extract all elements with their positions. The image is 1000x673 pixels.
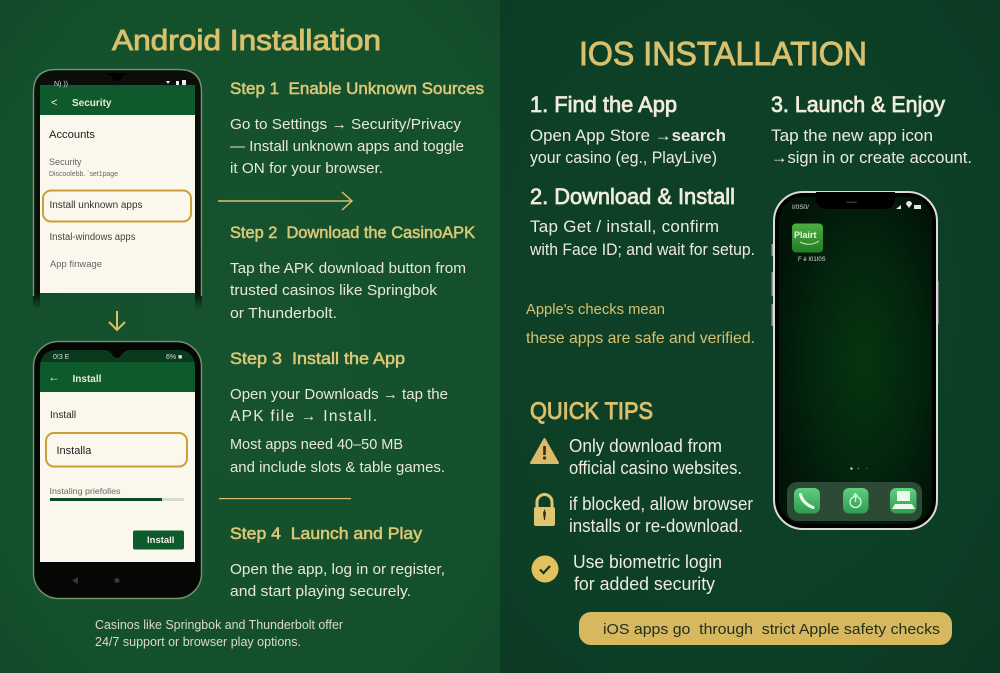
- phone: Android security settings: Security: [72, 98, 112, 109]
- phone: Android security settings: [33, 70, 202, 309]
- step 2: trusted casinos like Springbok: [230, 282, 438, 299]
- background: iOS panel: [500, 0, 1000, 673]
- phone: Android install screen: 6% ■: [166, 354, 182, 361]
- app icon: Plairt: [792, 224, 826, 263]
- iOS step 1: Open App Store →search: [530, 126, 726, 145]
- arrow: down between phones: [109, 311, 125, 330]
- iPhone mockup: I/0S0/: [792, 204, 809, 211]
- step 4: [230, 524, 445, 600]
- phone: Android security settings: Accounts: [49, 129, 96, 141]
- button: Install: Install: [147, 535, 174, 546]
- iOS step 3: 3. Launch & Enjoy: [771, 92, 945, 117]
- step 3: APK file → Install.: [230, 408, 377, 425]
- highlight: Install unknown apps: Install unknown apps: [50, 200, 142, 211]
- highlight: Installa: [46, 433, 187, 466]
- iOS step 2: [529, 184, 755, 259]
- phone: Android install screen: ←: [48, 370, 60, 384]
- step 3: and include slots & table games.: [230, 459, 445, 476]
- step 4: and start playing securely.: [230, 583, 411, 600]
- tip: official websites: official casino websites.: [569, 458, 742, 478]
- arrow: right from step 1: [218, 192, 352, 210]
- step 3: Step 3 Install the App: [230, 349, 405, 368]
- background: Android panel: [0, 0, 500, 673]
- phone: Android security settings: <: [51, 97, 57, 109]
- step 1: [230, 79, 484, 177]
- app icon: Plairt: Plairt: [794, 230, 817, 240]
- step 1: — Install unknown apps and toggle: [230, 138, 464, 155]
- iOS step 1: your casino (eg., PlayLive): [530, 148, 717, 167]
- iOS step 2: 2. Download & Install: [530, 184, 735, 209]
- step 4: Open the app, log in or register,: [230, 561, 445, 578]
- iOS step 2: with Face ID; and wait for setup.: [529, 240, 755, 259]
- icon: padlock: [534, 494, 555, 526]
- callout: safety checks pill: [579, 612, 952, 645]
- step 3: [230, 349, 448, 476]
- heading: iOS Installation: IOS INSTALLATION: [579, 35, 867, 72]
- tip: biometric: Use biometric login: [573, 552, 722, 572]
- iOS step 3: →sign in or create account.: [771, 148, 972, 167]
- iOS step 2: Tap Get / install, confirm: [530, 217, 719, 236]
- phone: Android security settings: Discoolebb. `set1page: [49, 171, 118, 178]
- phone: Android install screen: Install: [50, 410, 76, 421]
- progress bar: [50, 498, 184, 501]
- icon: check circle: [532, 556, 558, 582]
- icon: timer: [843, 488, 868, 514]
- phone: Android security settings: Security: [49, 157, 82, 167]
- phone: Android install screen: Instaling priefolles: [50, 486, 120, 496]
- page dots: [850, 467, 868, 470]
- dock: [787, 482, 922, 521]
- tip: blocked: if blocked, allow browser: [569, 494, 753, 514]
- step 2: [230, 223, 476, 322]
- tip: blocked: [534, 494, 753, 536]
- phone: Android install screen: [34, 342, 202, 598]
- phone: Android security settings: N) )): [54, 81, 68, 88]
- step 1: Step 1 Enable Unknown Sources: [230, 79, 484, 98]
- phone: Android install screen: 0!3 E: [53, 354, 70, 361]
- heading: Quick Tips: QUICK TIPS: [530, 398, 653, 425]
- note: Apple's checks: Apple's checks mean: [526, 301, 665, 318]
- heading: Android Installation: Android Installation: [112, 25, 381, 57]
- icon: laptop: [890, 488, 916, 514]
- step 3: Most apps need 40–50 MB: [230, 436, 403, 453]
- step 4: Step 4 Launch and Play: [230, 524, 423, 543]
- icon: warning: [531, 439, 558, 463]
- callout: safety checks pill: iOS apps go through strict Apple safety checks: [603, 621, 940, 638]
- step 3: Open your Downloads → tap the: [230, 386, 448, 403]
- icon: phone: [794, 488, 820, 514]
- phone: Android security settings: Instal-windows apps: [50, 232, 136, 243]
- app icon: Plairt: F é I01I0S: [798, 257, 826, 263]
- iPhone mockup: [772, 192, 939, 529]
- tip: official websites: Only download from: [569, 436, 722, 456]
- footnote: support: [95, 618, 343, 649]
- step 2: or Thunderbolt.: [230, 305, 337, 322]
- phone: Android security settings: App finwage: [50, 259, 102, 270]
- highlight: Installa: Installa: [56, 445, 92, 457]
- iOS step 1: [530, 92, 726, 167]
- step 1: Go to Settings → Security/Privacy: [230, 116, 462, 133]
- iOS step 3: Tap the new app icon: [771, 126, 933, 145]
- iOS step 1: 1. Find the App: [530, 92, 677, 117]
- note: Apple's checks: [526, 301, 755, 347]
- step 1: it ON for your browser.: [230, 160, 383, 177]
- tip: biometric: for added security: [574, 574, 715, 594]
- step 2: Tap the APK download button from: [230, 260, 466, 277]
- phone: Android install screen: Install: [72, 374, 102, 385]
- footnote: support: 24/7 support or browser play options.: [95, 635, 301, 649]
- button: Install: [133, 530, 184, 550]
- tip: blocked: installs or re-download.: [569, 516, 743, 536]
- step 2: Step 2 Download the CasinoAPK: [230, 223, 476, 242]
- highlight: Install unknown apps: [43, 190, 191, 222]
- tip: official websites: [531, 436, 742, 478]
- footnote: support: Casinos like Springbok and Thunderbolt offer: [95, 618, 343, 632]
- tip: biometric: [532, 552, 722, 594]
- iOS step 3: [771, 92, 972, 167]
- note: Apple's checks: these apps are safe and verified.: [526, 330, 755, 347]
